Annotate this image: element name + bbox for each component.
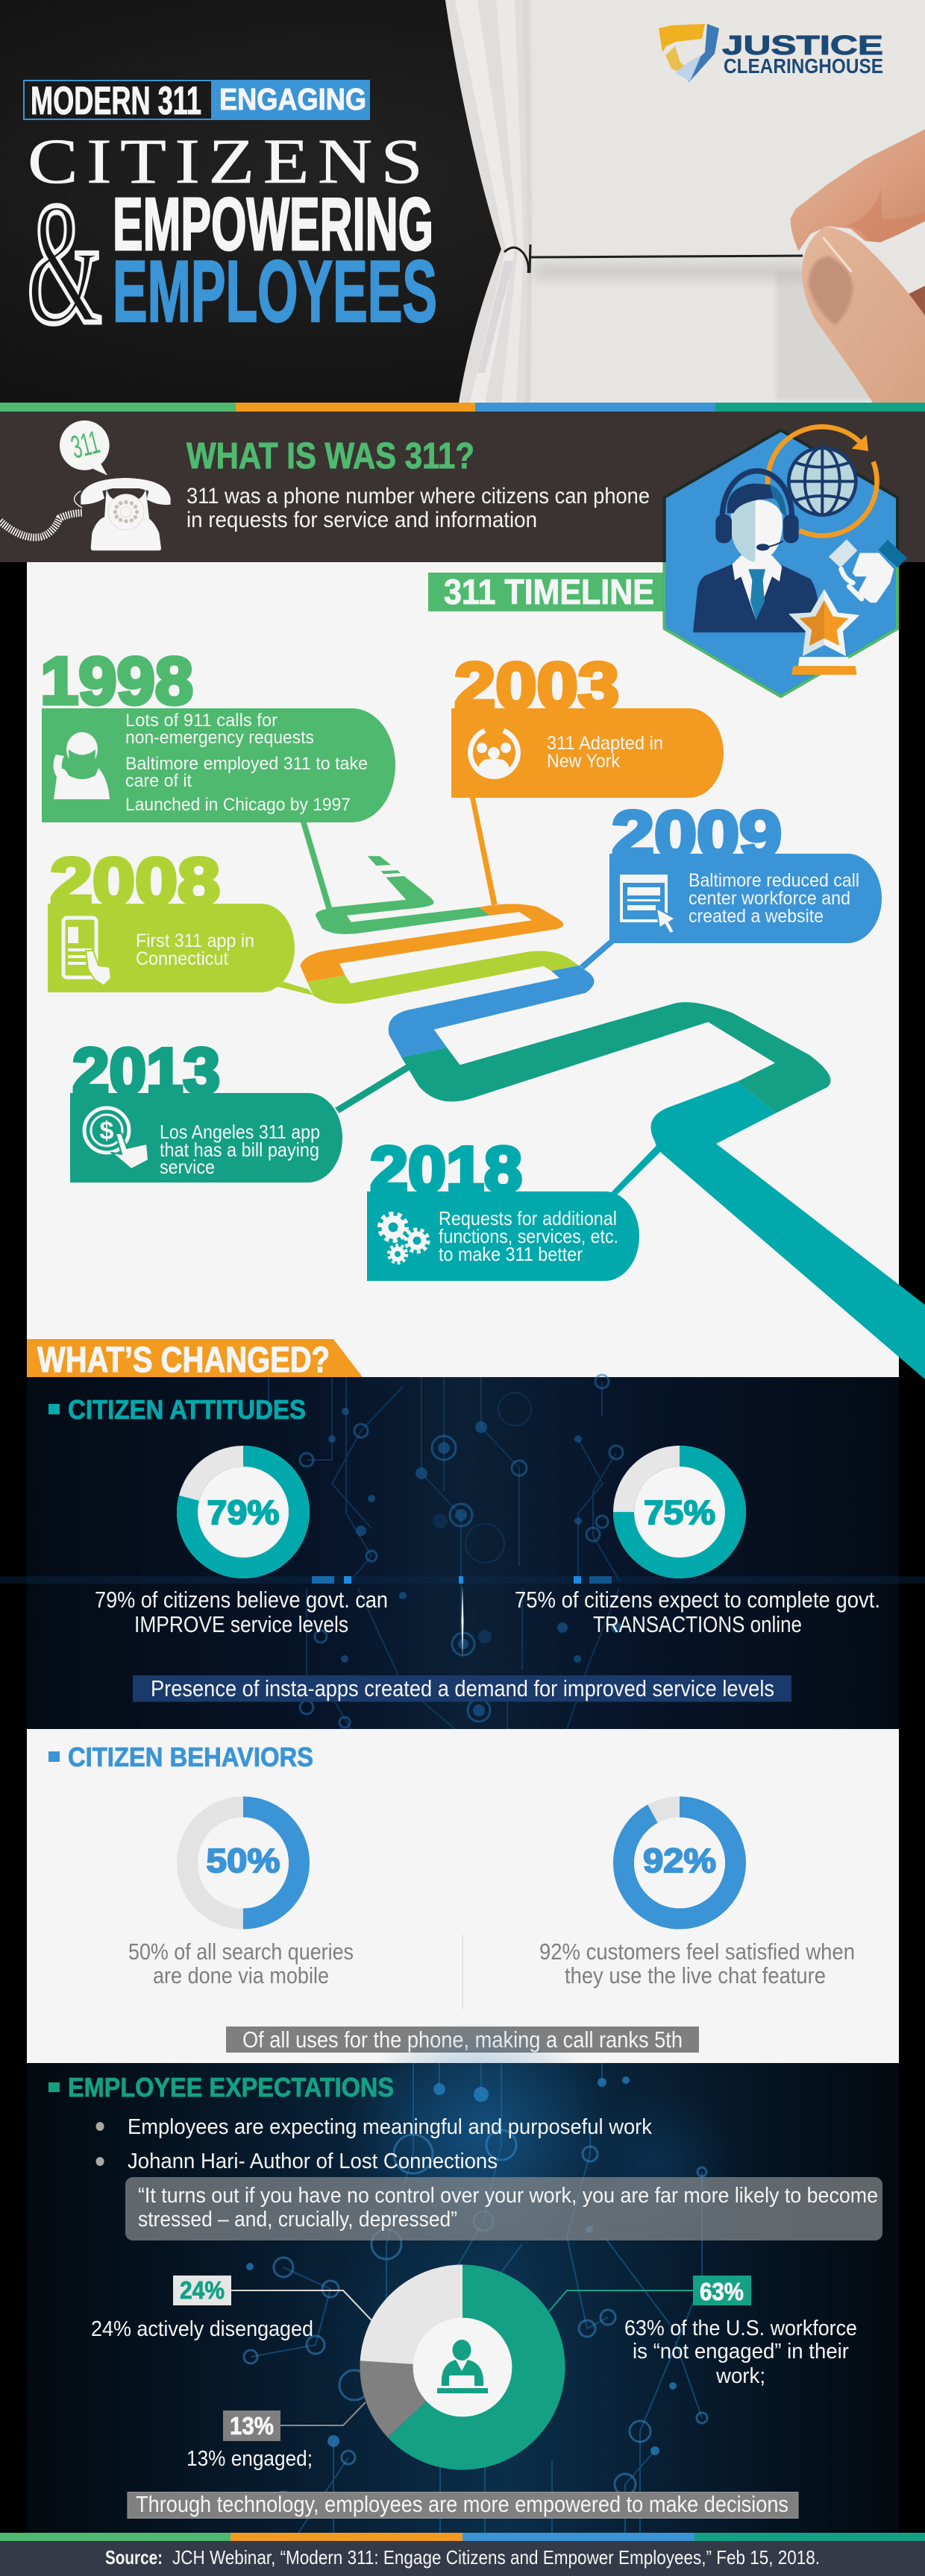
timeline label: 311 TIMELINE bbox=[444, 572, 654, 611]
caption: 79 percent: IMPROVE service levels bbox=[134, 1611, 348, 1637]
timeline card: 2008: First 311 app in bbox=[136, 930, 254, 951]
callout: 24 percent bbox=[91, 2276, 371, 2341]
timeline card: 2013: 2013 bbox=[72, 1036, 220, 1107]
timeline card: 2009: 2009 bbox=[612, 797, 782, 871]
callout: 13 percent: 13% engaged; bbox=[186, 2447, 313, 2471]
timeline card: 2018: Requests for additional bbox=[439, 1207, 617, 1229]
icon: phone app bbox=[63, 918, 111, 986]
curtain photo bbox=[445, 0, 925, 403]
quote box: stressed – and, crucially, depressed” bbox=[138, 2208, 457, 2232]
road segment: teal bbox=[401, 1002, 830, 1113]
caption: 92 percent: they use the live chat feature bbox=[565, 1962, 826, 1988]
circuit section: employee expectations background bbox=[27, 2021, 899, 2533]
donut: 92 percent: 92% bbox=[643, 1842, 716, 1880]
pie chart: workforce engagement bbox=[360, 2264, 565, 2470]
header background bbox=[0, 0, 925, 403]
timeline card: 1998: care of it bbox=[125, 771, 192, 791]
timeline card: 2009 bbox=[609, 797, 882, 943]
heading: what is was 311: WHAT IS WAS 311? bbox=[186, 436, 474, 476]
timeline card: 2013: that has a bill paying bbox=[160, 1139, 319, 1161]
road segment: blue bbox=[389, 966, 594, 1057]
icon: telephone with speech bubble: 311 bbox=[68, 424, 104, 466]
callout: 63 percent: 63% bbox=[700, 2278, 744, 2305]
colour stripe bottom bbox=[0, 2533, 925, 2541]
banner: empowered employees: Through technology, employees are more empowered to make decisions bbox=[136, 2491, 788, 2517]
label: what's changed: WHAT’S CHANGED? bbox=[37, 1341, 330, 1380]
timeline card: 2013 bbox=[70, 1036, 342, 1182]
callout: 24 percent: 24% actively disengaged bbox=[91, 2317, 313, 2341]
quote box: “It turns out if you have no control over your work, you are far more likely to become bbox=[138, 2184, 878, 2208]
icon: employee at laptop bbox=[437, 2340, 488, 2393]
timeline card: 2008 bbox=[48, 844, 295, 992]
timeline card: 2003: 311 Adapted in bbox=[547, 733, 663, 754]
text: 311 description: in requests for service and information bbox=[186, 508, 537, 532]
timeline card: 2013: Los Angeles 311 app bbox=[160, 1121, 320, 1143]
timeline card: 1998: Baltimore employed 311 to take bbox=[125, 754, 368, 774]
timeline card: 2003 bbox=[451, 649, 724, 798]
callout: 13 percent: 13% bbox=[230, 2412, 274, 2440]
footer source bbox=[0, 2541, 925, 2576]
timeline card: 2009: Baltimore reduced call bbox=[689, 870, 859, 891]
photo: hand pulling string bbox=[776, 129, 925, 403]
donut: 50 percent: 50% bbox=[206, 1842, 280, 1880]
callout: 63 percent: 63% of the U.S. workforce bbox=[624, 2317, 857, 2340]
timeline card: 2018: 2018 bbox=[370, 1134, 522, 1206]
banner: insta-apps: Presence of insta-apps created a demand for improved service levels bbox=[151, 1675, 774, 1701]
title: employees: EMPLOYEES bbox=[113, 242, 437, 340]
donut: 50 percent bbox=[187, 1807, 299, 1919]
connector: 2008 bbox=[278, 982, 313, 995]
connector: 2009 bbox=[580, 939, 614, 969]
footer source: Source: bbox=[105, 2546, 163, 2569]
timeline card: 1998 bbox=[40, 644, 395, 822]
road segment: lime bbox=[307, 951, 579, 1004]
bullet list bbox=[95, 2115, 652, 2173]
callout: 63 percent: work; bbox=[715, 2364, 765, 2388]
icon: string and knot bbox=[504, 245, 803, 273]
icon: gears bbox=[380, 1214, 428, 1263]
timeline card: 2003: 2003 bbox=[454, 649, 619, 722]
circuit section: citizen attitudes background bbox=[0, 1375, 925, 1729]
timeline card: 2009: created a website bbox=[689, 906, 824, 927]
caption: 92 percent bbox=[539, 1939, 855, 1988]
icon: dollar tap: $ bbox=[100, 1117, 114, 1145]
caption: 50 percent: 50% of all search queries bbox=[128, 1939, 354, 1965]
timeline card: 2018: functions, services, etc. bbox=[439, 1225, 618, 1247]
caption: 92 percent: 92% customers feel satisfied when bbox=[539, 1939, 855, 1965]
timeline card: 1998: non-emergency requests bbox=[125, 728, 314, 748]
footer source: JCH Webinar, “Modern 311: Engage Citizens and Empower Employees,” Feb 15, 2018. bbox=[172, 2546, 820, 2569]
icon: dollar tap bbox=[84, 1108, 148, 1169]
timeline card: 1998: Lots of 911 calls for bbox=[125, 711, 278, 731]
timeline road bbox=[300, 856, 925, 1379]
connector: 2013 bbox=[335, 1064, 410, 1113]
caption: 75 percent: 75% of citizens expect to complete govt. bbox=[515, 1587, 880, 1613]
quote box bbox=[125, 2177, 882, 2240]
timeline card: 2018: to make 311 better bbox=[439, 1243, 583, 1265]
bullet list: Employees are expecting meaningful and purposeful work bbox=[128, 2115, 652, 2139]
icon: telephone with speech bubble bbox=[0, 421, 171, 550]
banner: phone use: Of all uses for the phone, making a call ranks 5th bbox=[242, 2027, 683, 2053]
caption: 50 percent bbox=[128, 1939, 354, 1988]
timeline card: 2003: New York bbox=[547, 751, 620, 772]
road segment: orange bbox=[300, 904, 563, 982]
title badge: MODERN 311 bbox=[31, 79, 201, 123]
hexagon agent badge bbox=[665, 426, 907, 696]
donut: 79 percent: 79% bbox=[207, 1493, 279, 1531]
heading: employee expectations: EMPLOYEE EXPECTATIONS bbox=[68, 2072, 394, 2103]
caption: 50 percent: are done via mobile bbox=[153, 1962, 329, 1988]
text: 311 description bbox=[186, 484, 650, 532]
callout: 63 percent bbox=[549, 2276, 857, 2388]
connector: 2018 bbox=[610, 1144, 662, 1195]
donut: 79 percent bbox=[187, 1456, 299, 1568]
title: citizens: CITIZENS bbox=[28, 126, 423, 197]
donut: 75 percent bbox=[624, 1456, 736, 1568]
timeline card: 2008: 2008 bbox=[50, 844, 220, 918]
road segment: green bbox=[316, 856, 490, 934]
logo: Justice Clearinghouse: JUSTICE bbox=[722, 30, 883, 60]
connector: 2003 bbox=[470, 798, 498, 905]
what is 311 band bbox=[0, 412, 925, 562]
road segment: cyan bbox=[650, 1082, 925, 1379]
side margins bbox=[0, 562, 925, 2533]
icon: citizens group bbox=[470, 731, 518, 776]
heading: citizen attitudes: CITIZEN ATTITUDES bbox=[68, 1394, 306, 1425]
panel: citizen behaviors bbox=[27, 1729, 899, 2063]
text: 311 description: 311 was a phone number where citizens can phone bbox=[186, 484, 650, 508]
title: ampersand: & bbox=[27, 166, 102, 360]
donut: 92 percent bbox=[624, 1807, 736, 1919]
connector: 1998 bbox=[301, 822, 332, 909]
timeline card: 1998: 1998 bbox=[40, 644, 193, 719]
icon: person on phone bbox=[53, 732, 110, 799]
title: empowering: EMPOWERING bbox=[113, 183, 433, 266]
heading: citizen behaviors: CITIZEN BEHAVIORS bbox=[68, 1742, 313, 1772]
caption: 79 percent: 79% of citizens believe govt. can bbox=[95, 1587, 388, 1613]
caption: 75 percent: TRANSACTIONS online bbox=[593, 1611, 802, 1637]
logo: Justice Clearinghouse: CLEARINGHOUSE bbox=[724, 54, 883, 78]
colour stripe top bbox=[0, 403, 925, 412]
timeline card: 1998: Launched in Chicago by 1997 bbox=[125, 795, 351, 815]
callout: 13 percent bbox=[186, 2402, 366, 2471]
donut: 75 percent: 75% bbox=[644, 1493, 715, 1531]
caption: 79 percent bbox=[95, 1587, 388, 1637]
icon: website cursor bbox=[621, 876, 675, 933]
timeline card: 2013: service bbox=[160, 1156, 215, 1178]
timeline panel bbox=[27, 562, 899, 1377]
timeline card: 2008: Connecticut bbox=[136, 948, 228, 969]
logo: Justice Clearinghouse bbox=[659, 24, 883, 82]
title badge: ENGAGING bbox=[219, 82, 366, 116]
caption: 75 percent bbox=[515, 1587, 880, 1637]
timeline card: 2009: center workforce and bbox=[689, 888, 850, 909]
timeline card: 2018 bbox=[367, 1134, 639, 1281]
bullet list: Johann Hari- Author of Lost Connections bbox=[128, 2150, 498, 2173]
callout: 24 percent: 24% bbox=[180, 2276, 225, 2304]
callout: 63 percent: is “not engaged” in their bbox=[633, 2340, 849, 2364]
